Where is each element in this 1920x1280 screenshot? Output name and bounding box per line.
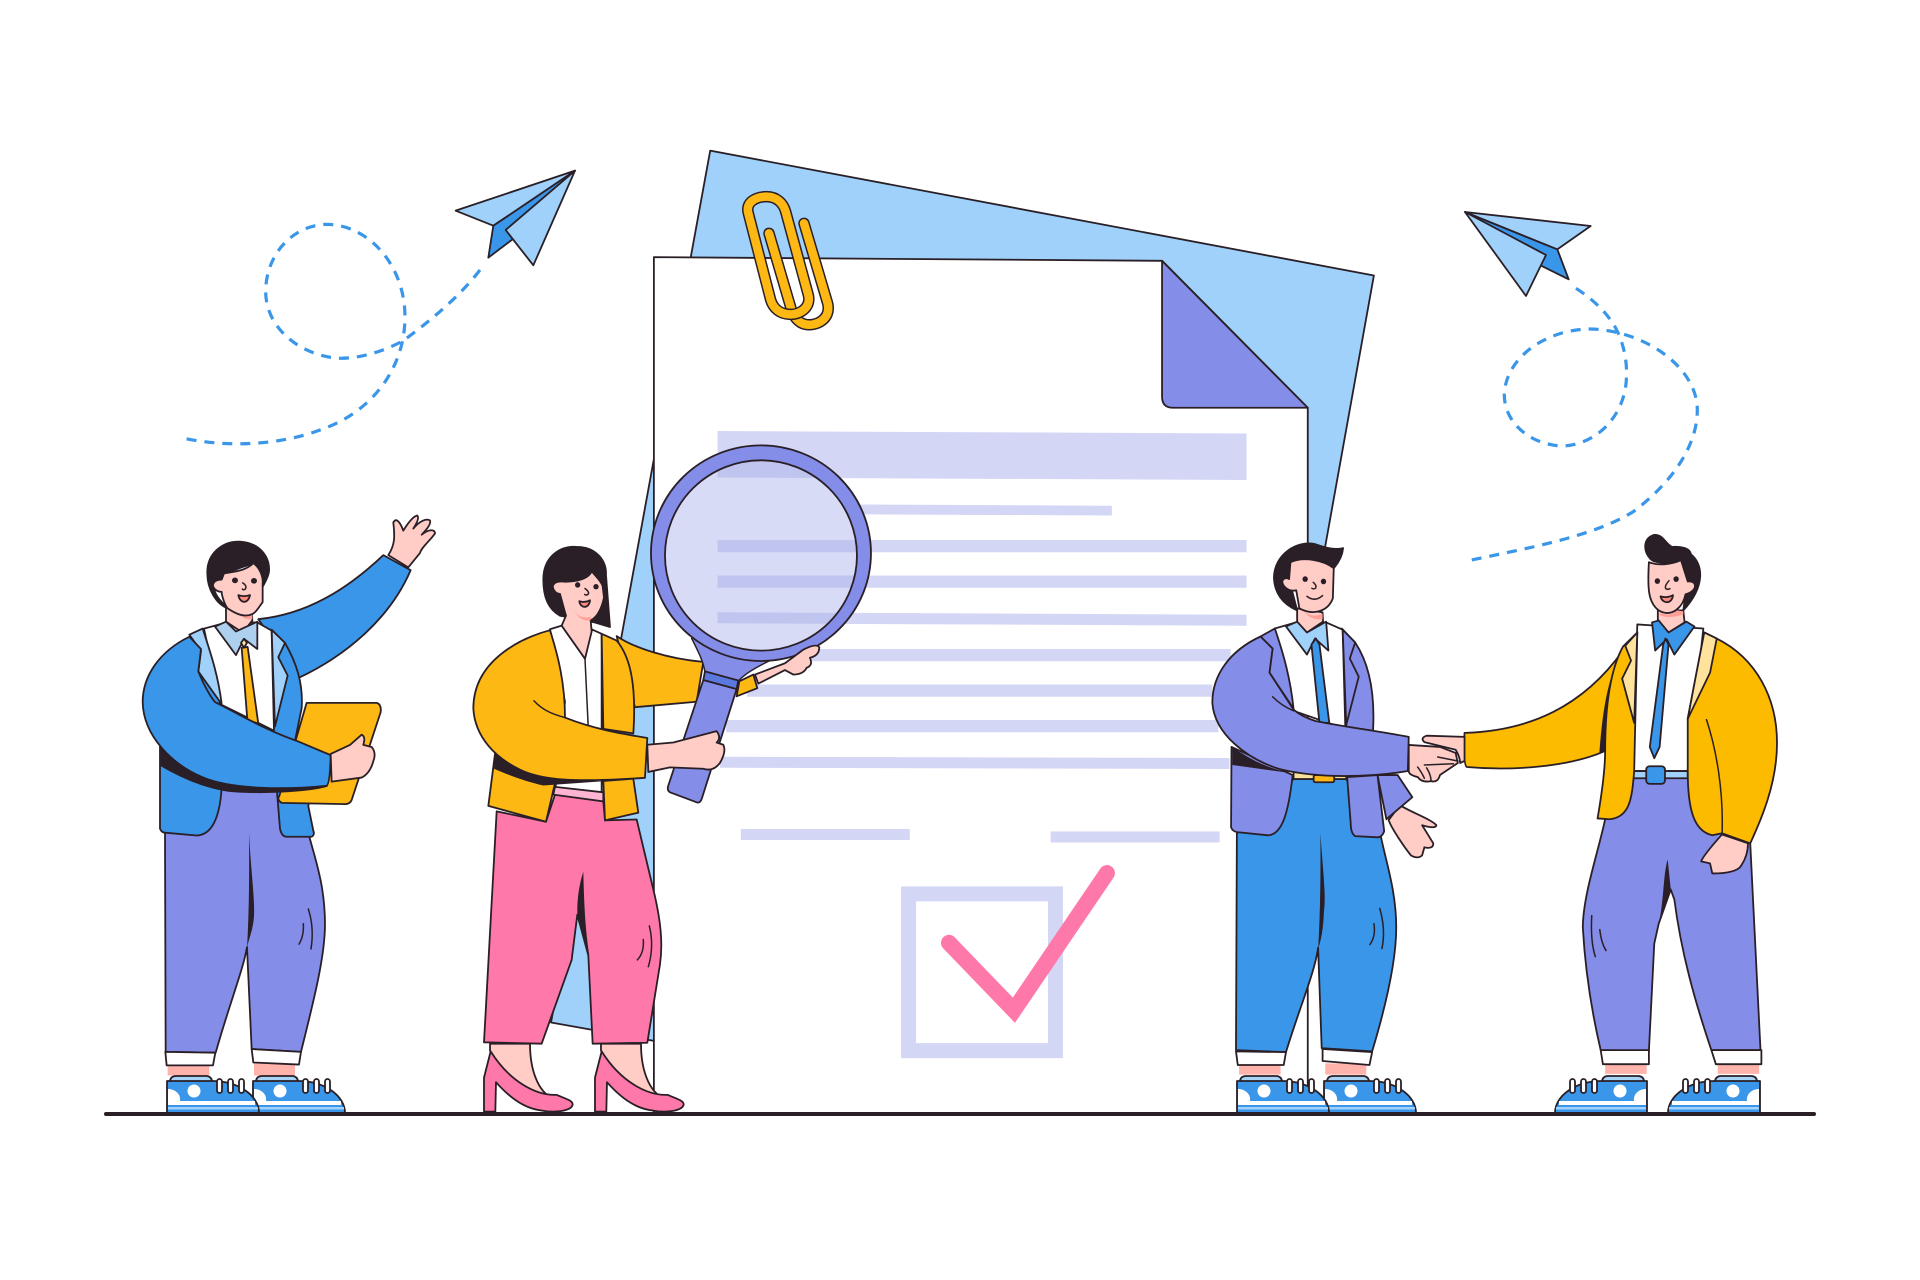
folded corner [1162, 261, 1308, 408]
document text lines [718, 431, 1247, 842]
front arm [1212, 637, 1409, 776]
shirt [1633, 624, 1703, 771]
waistband [553, 787, 603, 801]
head [543, 547, 610, 659]
right paper plane [1465, 212, 1591, 296]
belt [1633, 771, 1688, 778]
back arm [617, 636, 703, 707]
back blue sheet [551, 151, 1374, 1053]
jacket right panel [1342, 628, 1373, 731]
right lapel [1688, 632, 1717, 719]
person: man in yellow jacket shaking hands [1464, 535, 1777, 1113]
head [1645, 535, 1700, 613]
shirt [550, 626, 602, 792]
person: woman with magnifying glass [473, 445, 871, 1112]
holding hand [331, 735, 375, 782]
checkbox [909, 894, 1056, 1051]
head [1274, 543, 1343, 612]
person: man with tablet waving [143, 516, 435, 1113]
left lapel [1622, 632, 1637, 723]
jacket [160, 630, 314, 837]
near hand [647, 731, 724, 772]
neck [226, 607, 252, 633]
shirt [1275, 622, 1345, 729]
paper clip [748, 197, 828, 325]
shirt [204, 622, 274, 731]
left paper plane [456, 171, 575, 265]
white paper [654, 257, 1308, 1114]
tie [1311, 639, 1329, 723]
person: man in blue trousers shaking hands [1212, 543, 1436, 1113]
handshake [1409, 736, 1465, 782]
skirt trousers [484, 795, 661, 1044]
trousers [165, 786, 325, 1053]
trousers [1236, 779, 1396, 1052]
right jacket and sleeve [1688, 632, 1777, 843]
ground line [104, 1112, 1816, 1116]
waving hand [388, 516, 435, 567]
cuffs and socks [168, 1063, 295, 1076]
extended back arm [1464, 651, 1623, 768]
tablet [278, 703, 381, 804]
far sleeve [1377, 775, 1412, 819]
far hand [755, 646, 819, 684]
shoes [1555, 1076, 1760, 1113]
socks and cuffs [1239, 1063, 1366, 1075]
belt shadow [1232, 747, 1290, 773]
far sleeve [737, 675, 757, 696]
document stack [551, 151, 1374, 1114]
front arm [473, 630, 647, 780]
check mark [949, 873, 1107, 1010]
shoes [167, 1076, 345, 1113]
belt shadow [161, 747, 328, 793]
belt [1294, 771, 1346, 779]
trousers [1583, 775, 1760, 1051]
collar [215, 622, 257, 655]
head [207, 542, 269, 616]
raised back arm [258, 555, 411, 678]
magnifier [651, 445, 871, 803]
tie [1650, 639, 1669, 758]
front arm [143, 637, 331, 788]
left jacket panel [1598, 632, 1637, 819]
shoes [1237, 1076, 1416, 1113]
socks and cuffs [1605, 1064, 1759, 1074]
hip hand [1701, 834, 1748, 873]
lapels [1261, 628, 1294, 709]
right flight path [1472, 288, 1697, 560]
jacket lower [488, 754, 555, 822]
hanging hand [1389, 805, 1436, 857]
collar [1652, 620, 1694, 655]
left flight path [180, 224, 480, 444]
jacket lower panels [1231, 747, 1293, 835]
tie [242, 647, 258, 724]
belt shadow [494, 754, 607, 786]
neck [1658, 610, 1685, 632]
jacket right panel [602, 634, 634, 733]
legs and heels [484, 1044, 684, 1112]
neck [1297, 608, 1323, 632]
collar [1286, 622, 1328, 655]
lapels [189, 629, 222, 704]
